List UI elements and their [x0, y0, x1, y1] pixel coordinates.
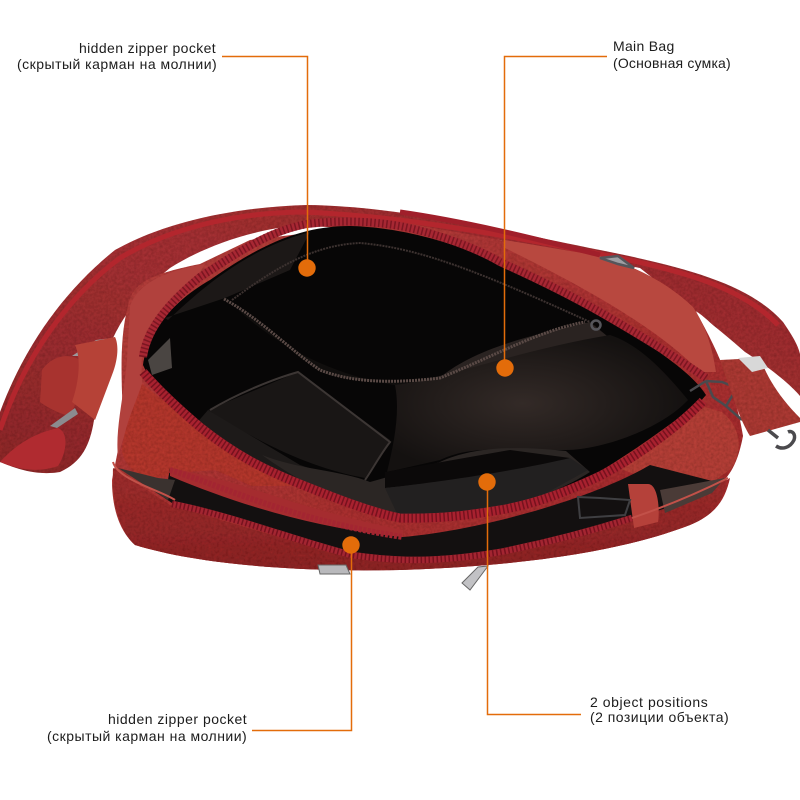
main compartment interior: [143, 226, 706, 520]
left strap loops and buckle: [40, 337, 117, 428]
callout: hidden zipper pocket top left: hidden zipper pocket: [79, 40, 216, 56]
callout: hidden zipper pocket bottom left: (скрытый карман на молнии): [47, 728, 247, 744]
bag body leather: [112, 222, 743, 570]
callout: main bag: [496, 38, 731, 377]
callout: hidden zipper pocket top left: [17, 40, 316, 277]
right strap tab and chain: [720, 356, 800, 448]
callout: 2 object positions: (2 позиции объекта): [590, 709, 729, 725]
callout: hidden zipper pocket top left: (скрытый карман на молнии): [17, 56, 217, 72]
zippers: [113, 212, 728, 560]
callout: hidden zipper pocket bottom left: hidden zipper pocket: [108, 711, 247, 727]
callout: main bag: (Основная сумка): [613, 55, 731, 71]
front pocket opening: [116, 465, 725, 560]
shoulder strap: [0, 205, 800, 473]
callout: hidden zipper pocket bottom left: [47, 536, 360, 744]
callout: main bag: Main Bag: [613, 38, 675, 54]
white gap between strap and bag, right side: [696, 311, 737, 361]
callout: 2 object positions: [478, 473, 729, 725]
metal hardware: [318, 256, 742, 590]
callout: 2 object positions: 2 object positions: [590, 694, 708, 710]
